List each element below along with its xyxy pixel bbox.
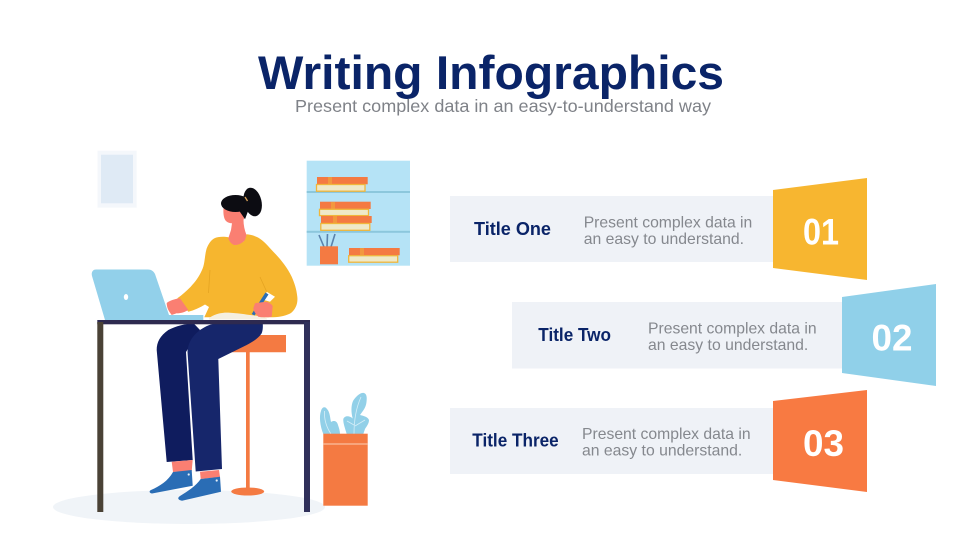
plant in orange pot bbox=[320, 393, 369, 506]
panel: title one bbox=[450, 178, 867, 280]
right hand bbox=[253, 302, 273, 317]
number tag bbox=[773, 178, 867, 280]
number tag bbox=[842, 284, 936, 386]
sweater folds bbox=[208, 270, 267, 293]
hair bbox=[221, 186, 265, 219]
row background bbox=[512, 302, 843, 368]
number: 02 bbox=[872, 317, 912, 358]
description: an easy to understand. bbox=[648, 337, 808, 354]
stool bbox=[230, 335, 286, 496]
title: Writing Infographics bbox=[258, 47, 724, 100]
hair band bbox=[245, 197, 248, 201]
illustration: woman writing at a desk bbox=[53, 151, 410, 524]
left hand bbox=[167, 298, 188, 315]
pencil bbox=[252, 292, 268, 316]
ground shadow bbox=[53, 490, 325, 524]
laptop bbox=[92, 270, 203, 320]
panel: title three bbox=[450, 390, 867, 492]
description: an easy to understand. bbox=[584, 231, 744, 248]
heading: Title Three bbox=[472, 430, 559, 451]
number: 03 bbox=[803, 423, 844, 464]
row background bbox=[450, 196, 774, 262]
subtitle: Present complex data in an easy-to-understand way bbox=[295, 96, 711, 116]
description: Present complex data in bbox=[582, 426, 751, 443]
heading: Title One bbox=[474, 218, 551, 239]
bookshelf bbox=[307, 161, 410, 266]
sweater bbox=[177, 234, 297, 317]
wall picture bbox=[98, 151, 137, 208]
heading: Title Two bbox=[538, 324, 611, 345]
number: 01 bbox=[803, 212, 839, 253]
trousers bbox=[157, 323, 263, 472]
panel: title two bbox=[512, 284, 936, 386]
row background bbox=[450, 408, 774, 474]
open notebook bbox=[209, 313, 267, 320]
number tag bbox=[773, 390, 867, 492]
desk bbox=[97, 320, 310, 512]
socks and shoes bbox=[150, 460, 221, 501]
neck and face bbox=[223, 206, 246, 245]
white gap between arm and body bbox=[264, 292, 275, 302]
description: Present complex data in bbox=[648, 320, 817, 337]
description: an easy to understand. bbox=[582, 443, 742, 460]
description: Present complex data in bbox=[584, 214, 752, 231]
